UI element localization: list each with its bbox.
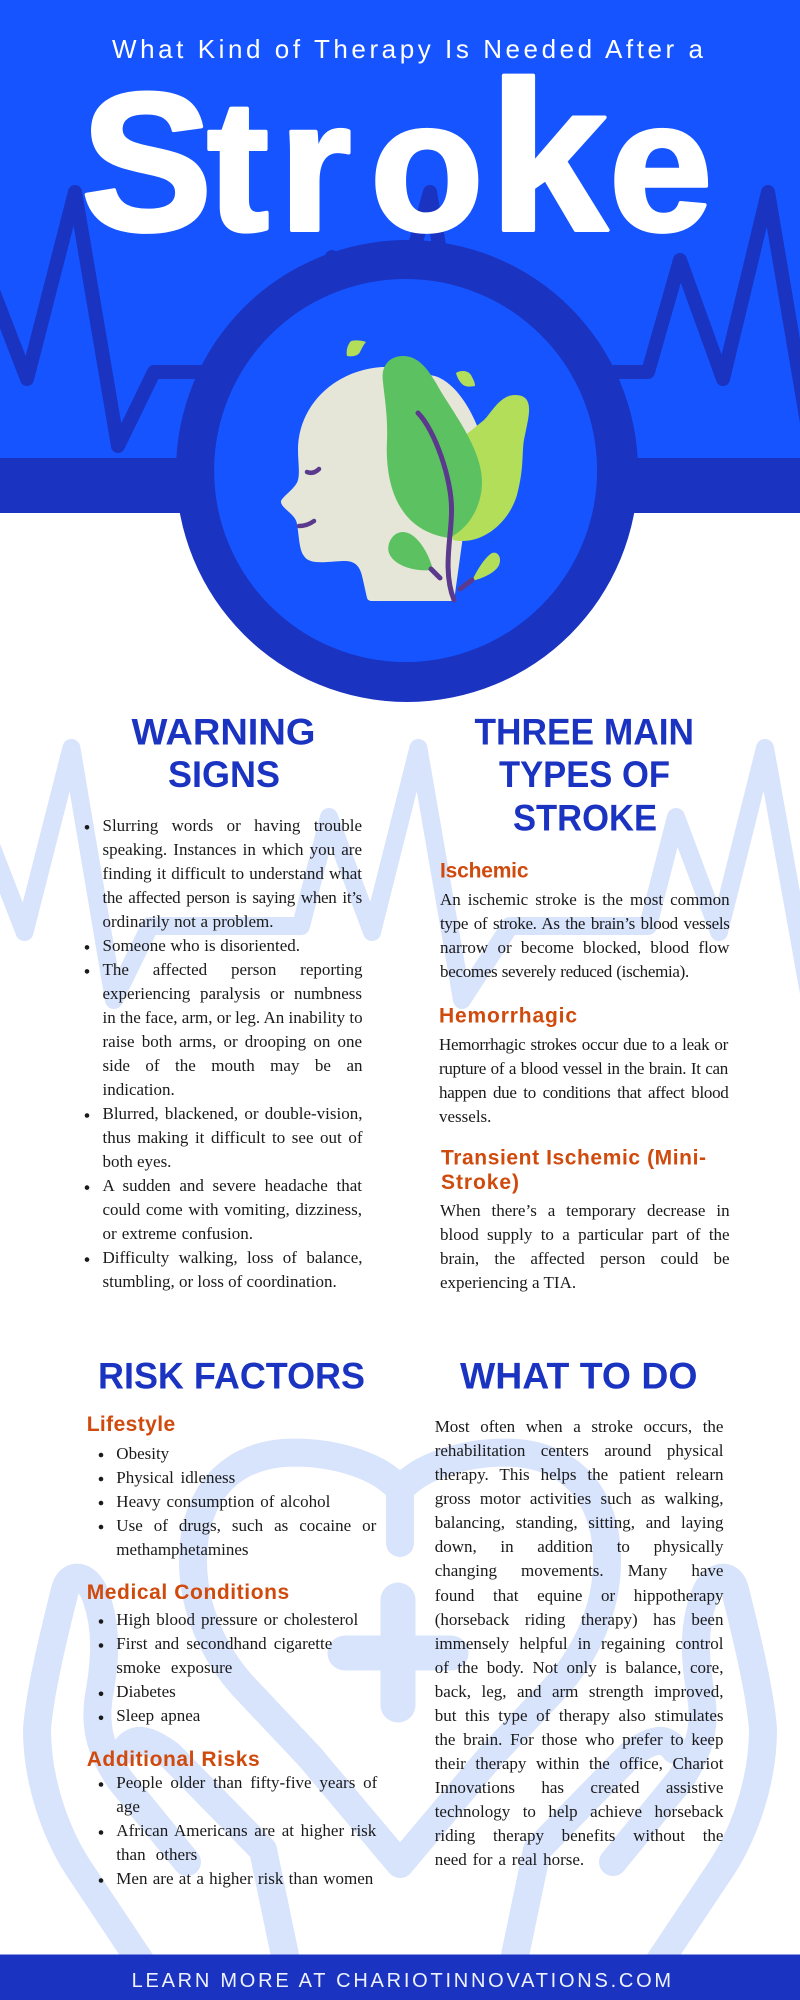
heading: three main types of stroke: STROKE	[513, 798, 657, 839]
heading: three main types of stroke: TYPES OF	[499, 754, 670, 795]
text: warning signs list: stumbling, or loss of coordination.	[102, 1272, 337, 1291]
title: Stroke: k	[489, 38, 608, 276]
text: warning signs list: speaking. Instances in which you are	[102, 840, 362, 859]
text: warning signs list: the affected person is saying when it’s	[102, 888, 362, 907]
text: hemorrhagic: vessels.	[439, 1107, 491, 1126]
background hands and heart watermark	[37, 1453, 763, 1965]
subheading: medical conditions: Medical Conditions	[87, 1581, 289, 1604]
text: warning signs list: A sudden and severe headache that	[102, 1176, 362, 1195]
text: what to do: need for a real horse.	[435, 1850, 584, 1869]
text: what to do: rehabilitation centers around physical	[435, 1441, 723, 1460]
panel: what to do	[435, 1356, 726, 1877]
text: what to do: therapy. This helps the patient relearn	[435, 1465, 723, 1484]
text: additional risks list: age	[116, 1797, 140, 1816]
heartbeat line	[0, 192, 800, 470]
text: what to do: immensely helpful in regaining control	[435, 1634, 723, 1653]
text: additional risks list: African Americans are at higher risk	[116, 1821, 376, 1840]
text: lifestyle list: Physical idleness	[116, 1468, 235, 1487]
subheading: transient ischemic: Stroke)	[441, 1171, 519, 1194]
text: what to do: technology to help achieve horseback	[435, 1802, 723, 1821]
text: transient ischemic: When there’s a temporary decrease in	[440, 1201, 730, 1220]
text: medical conditions list: High blood pressure or cholesterol	[116, 1610, 358, 1629]
heading: what to do: WHAT TO DO	[460, 1356, 698, 1397]
text: what to do: balancing, standing, sitting, and laying	[435, 1513, 723, 1532]
text: hemorrhagic: Hemorrhagic strokes occur due to a leak or	[439, 1035, 728, 1054]
text: warning signs list: Blurred, blackened, or double-vision,	[102, 1104, 362, 1123]
text: medical conditions list: First and secondhand cigarette	[116, 1634, 332, 1653]
text: what to do: Most often when a stroke occurs, the	[435, 1417, 723, 1436]
heading: warning signs: WARNING	[132, 711, 316, 752]
heading: warning signs: SIGNS	[168, 754, 280, 795]
text: medical conditions list	[116, 1608, 378, 1730]
text: what to do: riding therapy benefits without the	[435, 1826, 723, 1845]
heading: warning signs	[132, 711, 316, 795]
medical cross	[345, 1600, 451, 1705]
text: additional risks list: People older than fifty-five years of	[116, 1773, 377, 1792]
text: what to do: the brain. For those who prefer to keep	[435, 1730, 723, 1749]
text: transient ischemic: blood supply to a particular part of the	[440, 1225, 730, 1244]
text: warning signs list: thus making it difficult to see out of	[102, 1128, 362, 1147]
icon: head with leaves	[281, 340, 529, 601]
text: ischemic	[440, 888, 732, 986]
right hand	[513, 1578, 763, 1965]
title: Stroke: r	[279, 63, 351, 270]
text: ischemic: type of stroke. As the brain’s blood vessels	[440, 914, 730, 933]
bullets: warning signs	[85, 825, 89, 1262]
text: lifestyle list: Heavy consumption of alcohol	[116, 1492, 330, 1511]
text: lifestyle list	[116, 1442, 378, 1564]
title: small heading: What Kind of Therapy Is Needed After a	[112, 34, 704, 64]
text: what to do	[435, 1415, 726, 1877]
text: medical conditions list: Diabetes	[116, 1682, 176, 1701]
text: additional risks list	[116, 1771, 379, 1893]
text: what to do: changing movements. Many have	[435, 1561, 723, 1580]
text: transient ischemic	[440, 1199, 732, 1297]
text: additional risks list: than others	[116, 1845, 197, 1864]
heading: three main types of stroke: THREE MAIN	[474, 711, 694, 752]
text: what to do: gross motor activities such as walking,	[435, 1489, 723, 1508]
text: warning signs list: raise both arms, or drooping on one	[102, 1032, 362, 1051]
subheading: additional risks: Additional Risks	[87, 1748, 260, 1771]
text: warning signs list: in the face, arm, or leg. An inability to	[102, 1008, 363, 1027]
subheading: hemorrhagic: Hemorrhagic	[439, 1005, 577, 1028]
text: lifestyle list: Obesity	[116, 1444, 169, 1463]
text: warning signs list: ordinarily not a problem.	[102, 912, 274, 931]
text: warning signs list: indication.	[102, 1080, 175, 1099]
heart outline	[193, 1453, 607, 1864]
text: hemorrhagic: happen due to conditions that affect blood	[439, 1083, 728, 1102]
text: transient ischemic: brain, the affected person could be	[440, 1249, 730, 1268]
title: Stroke: e	[609, 63, 712, 270]
panel: warning signs	[85, 711, 364, 1304]
text: warning signs list: side of the mouth may be an	[102, 1056, 362, 1075]
text: what to do: found that equine or hippotherapy	[435, 1586, 723, 1604]
panel: risk factors	[87, 1356, 379, 1893]
text: warning signs list: both eyes.	[102, 1152, 171, 1171]
left hand	[37, 1578, 287, 1965]
medallion circle	[176, 240, 638, 702]
footer text: LEARN MORE AT CHARIOTINNOVATIONS.COM	[132, 1970, 671, 1992]
text: what to do: but this type of therapy also stimulates	[435, 1706, 723, 1725]
heading: three main types of stroke	[474, 711, 694, 839]
text: ischemic: becomes severely reduced (ischemia).	[440, 962, 689, 981]
text: what to do: down, in addition to physically	[435, 1537, 723, 1556]
subheading: transient ischemic	[441, 1146, 706, 1194]
panel: three main types of stroke	[439, 711, 732, 1297]
text: ischemic: narrow or become blocked, blood flow	[440, 938, 730, 957]
heading: risk factors: RISK FACTORS	[98, 1356, 365, 1397]
text: warning signs list: Difficulty walking, loss of balance,	[102, 1248, 362, 1267]
title: Stroke: o	[370, 63, 484, 270]
text: what to do: their therapy within the office, Chariot	[435, 1754, 723, 1773]
text: warning signs list: experiencing paralysis or numbness	[102, 984, 362, 1003]
text: what to do: of the body. Not only is balance, core,	[435, 1658, 723, 1677]
header banner	[0, 0, 800, 513]
text: warning signs list: Someone who is disoriented.	[102, 936, 300, 955]
text: hemorrhagic	[439, 1033, 731, 1131]
text: warning signs list: finding it difficult to understand what	[102, 864, 362, 883]
subheading: transient ischemic: Transient Ischemic (Mini-	[441, 1146, 706, 1169]
bullets: risk factors	[99, 1453, 103, 1883]
text: warning signs list: or extreme confusion.	[102, 1224, 253, 1243]
text: transient ischemic: experiencing a TIA.	[440, 1273, 576, 1292]
text: warning signs list: The affected person reporting	[102, 960, 362, 979]
title: Stroke: S	[81, 52, 212, 272]
text: ischemic: An ischemic stroke is the most common	[440, 890, 730, 909]
text: lifestyle list: Use of drugs, such as cocaine or	[116, 1516, 376, 1535]
text: what to do: Innovations has created assistive	[435, 1778, 723, 1797]
text: warning signs list: could come with vomiting, dizziness,	[102, 1200, 362, 1219]
text: additional risks list: Men are at a higher risk than women	[116, 1869, 373, 1888]
text: what to do: back, leg, and arm strength improved,	[435, 1682, 723, 1701]
title: Stroke: t	[207, 63, 269, 270]
text: what to do: (horseback riding therapy) has been	[435, 1610, 723, 1629]
subheading: lifestyle: Lifestyle	[87, 1413, 175, 1436]
text: warning signs list: Slurring words or having trouble	[102, 816, 362, 835]
subheading: ischemic: Ischemic	[440, 859, 529, 882]
background heartbeat watermark	[0, 748, 800, 1010]
footer bar	[0, 1954, 800, 2000]
text: medical conditions list: Sleep apnea	[116, 1706, 200, 1725]
text: medical conditions list: smoke exposure	[116, 1658, 232, 1677]
text: lifestyle list: methamphetamines	[116, 1540, 248, 1559]
text: hemorrhagic: rupture of a blood vessel in the brain. It can	[439, 1059, 728, 1078]
text: warning signs list	[102, 814, 364, 1304]
